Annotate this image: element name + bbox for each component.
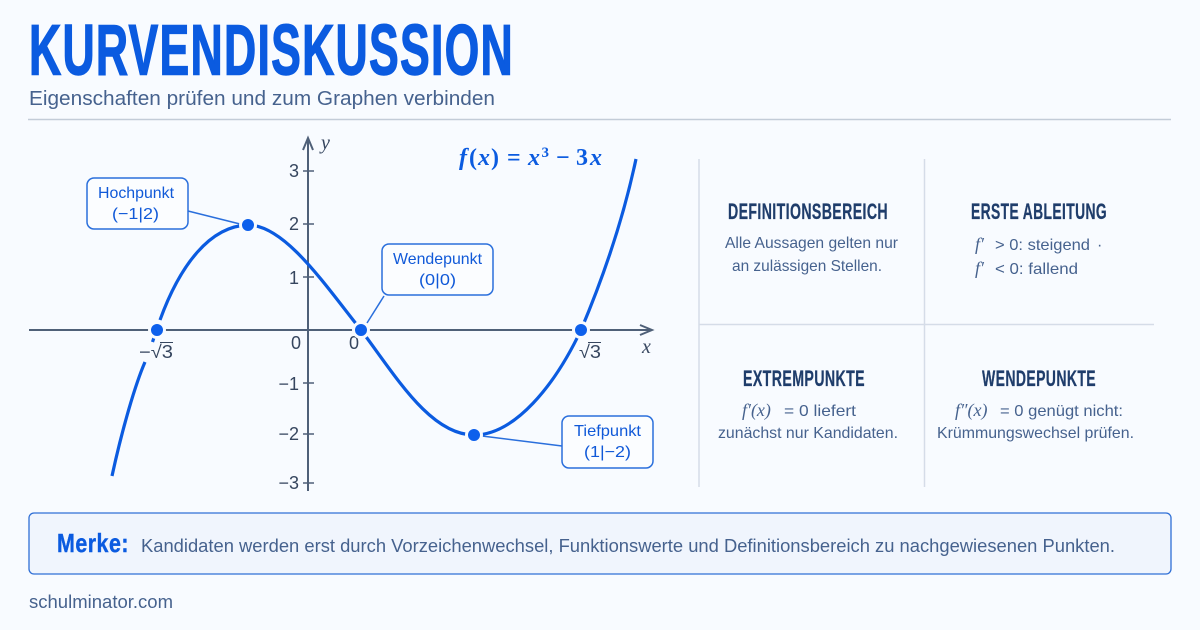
y axis with ticks bbox=[303, 138, 314, 491]
callout: Hochpunkt: (−1|2) bbox=[112, 206, 159, 223]
y tick numbers: −1 bbox=[278, 374, 299, 394]
points on the curve bbox=[150, 218, 588, 442]
callout: Merke: Merke: bbox=[57, 528, 129, 558]
panel: Wendepunkte: Krümmungswechsel prüfen. bbox=[937, 425, 1134, 442]
y tick numbers: 3 bbox=[289, 161, 299, 181]
panel: Extrempunkte bbox=[718, 366, 898, 442]
function formula: ( bbox=[469, 145, 477, 171]
function formula: x bbox=[477, 145, 490, 171]
panel: Wendepunkte: WENDEPUNKTE bbox=[982, 366, 1096, 391]
callout: Tiefpunkt: (1|−2) bbox=[584, 444, 631, 461]
panel: Erste Ableitung: · bbox=[1097, 237, 1102, 254]
panel: Definitionsbereich: an zulässigen Stellen. bbox=[732, 258, 882, 275]
label minus root 3: −√3 bbox=[139, 342, 173, 362]
curve bbox=[112, 159, 636, 476]
callout: Hochpunkt bbox=[87, 178, 188, 229]
panel: Wendepunkte bbox=[937, 366, 1134, 442]
callout: Wendepunkt: Wendepunkt bbox=[393, 251, 483, 268]
y tick numbers: −2 bbox=[278, 424, 299, 444]
zero labels bbox=[291, 333, 359, 353]
x axis name: x bbox=[641, 336, 651, 358]
y tick numbers: −3 bbox=[278, 473, 299, 493]
panel: Extrempunkte: f′(x) bbox=[742, 400, 771, 421]
leader lines bbox=[188, 211, 562, 446]
callout: Hochpunkt: Hochpunkt bbox=[98, 185, 175, 202]
panel: Wendepunkte: f″(x) bbox=[955, 400, 987, 421]
panel: Erste Ableitung: f′ bbox=[975, 258, 985, 278]
callout: Tiefpunkt bbox=[562, 416, 653, 468]
y tick numbers: 2 bbox=[289, 214, 299, 234]
panel: Erste Ableitung: < 0: fallend bbox=[995, 261, 1078, 278]
panel: Extrempunkte: = 0 liefert bbox=[784, 403, 857, 420]
panel: Erste Ableitung: > 0: steigend bbox=[995, 237, 1090, 254]
panel: Wendepunkte: = 0 genügt nicht: bbox=[1000, 403, 1123, 420]
chart: graph of f(x) bbox=[29, 132, 653, 493]
subtitle: Eigenschaften prüfen und zum Graphen verbinden bbox=[29, 88, 495, 110]
panel: Extrempunkte: EXTREMPUNKTE bbox=[743, 366, 865, 391]
panel: Erste Ableitung bbox=[971, 199, 1107, 278]
callout: Merke bbox=[29, 513, 1171, 574]
function formula: = bbox=[507, 145, 521, 171]
zero labels: 0 bbox=[349, 333, 359, 353]
function formula: f bbox=[459, 145, 469, 171]
panel: Definitionsbereich: DEFINITIONSBEREICH bbox=[728, 199, 888, 224]
function formula: x bbox=[589, 145, 602, 171]
panel: Extrempunkte: zunächst nur Kandidaten. bbox=[718, 425, 898, 442]
callout: Tiefpunkt: Tiefpunkt bbox=[574, 423, 642, 440]
panel: Definitionsbereich: Alle Aussagen gelten nur bbox=[725, 235, 899, 252]
x axis bbox=[29, 325, 652, 335]
y axis name: y bbox=[319, 132, 330, 154]
function formula: x bbox=[527, 145, 540, 171]
y tick numbers bbox=[278, 161, 299, 493]
function formula: ) bbox=[491, 145, 499, 171]
footer: schulminator.com bbox=[29, 592, 173, 612]
callout: Wendepunkt: (0|0) bbox=[419, 272, 456, 289]
title: KURVENDISKUSSION bbox=[29, 12, 514, 90]
y tick numbers: 1 bbox=[289, 268, 299, 288]
zero labels: 0 bbox=[291, 333, 301, 353]
panel: Definitionsbereich bbox=[725, 199, 899, 275]
function formula: − bbox=[556, 145, 570, 171]
function formula: 3 bbox=[542, 145, 549, 161]
label root 3: √3 bbox=[579, 342, 601, 362]
callout: Merke: Kandidaten werden erst durch Vorzeichenwechsel, Funktionswerte und Definitionsbereich zu nachgewiesenen Punkten. bbox=[141, 536, 1115, 556]
callout: Wendepunkt bbox=[382, 244, 493, 295]
function formula: 3 bbox=[576, 145, 588, 171]
panel: Erste Ableitung: ERSTE ABLEITUNG bbox=[971, 199, 1107, 224]
panel: Erste Ableitung: f′ bbox=[975, 234, 985, 254]
function formula bbox=[459, 145, 602, 171]
